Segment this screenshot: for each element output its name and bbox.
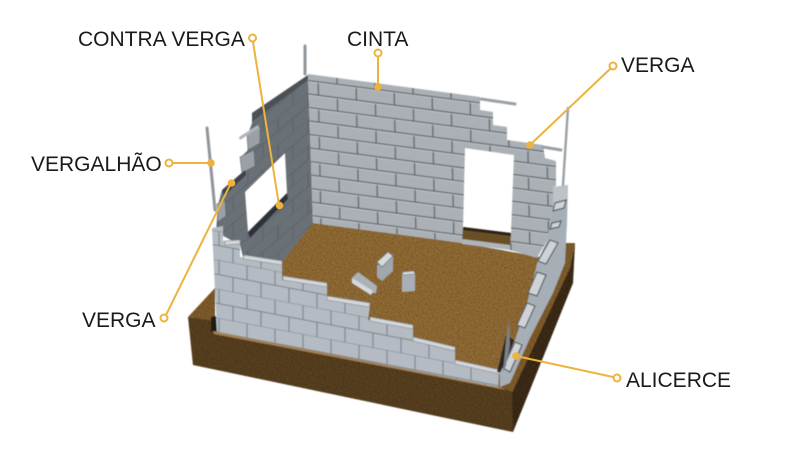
block tops — [225, 240, 500, 374]
label: CINTA — [347, 28, 408, 91]
panel: right side wall — [497, 185, 568, 387]
panel: back wall with door — [308, 74, 556, 258]
label: ALICERCE — [512, 352, 731, 392]
label: ALICERCE: ALICERCE — [626, 369, 731, 392]
label: VERGA lower left — [82, 179, 235, 332]
loose blocks on floor — [352, 252, 415, 295]
label: VERGALHÃO: VERGALHÃO — [31, 152, 162, 176]
label: CINTA: CINTA — [347, 28, 408, 51]
door threshold — [462, 227, 511, 250]
panel: front stepped wall — [212, 226, 500, 387]
panel: left wall with window — [216, 75, 313, 262]
label: VERGALHÃO — [31, 152, 215, 176]
label: VERGA top right: VERGA — [621, 54, 695, 77]
foundation: soil base — [188, 243, 575, 432]
rebar rods — [207, 46, 568, 210]
floor — [260, 223, 545, 385]
label: CONTRA VERGA — [78, 28, 283, 209]
hollow block tops — [503, 200, 566, 372]
label: VERGA top right — [526, 54, 695, 149]
label: VERGA lower left: VERGA — [82, 309, 156, 332]
building illustration — [188, 46, 575, 432]
stepped lit blocks — [217, 126, 260, 222]
label: CONTRA VERGA: CONTRA VERGA — [78, 28, 245, 51]
